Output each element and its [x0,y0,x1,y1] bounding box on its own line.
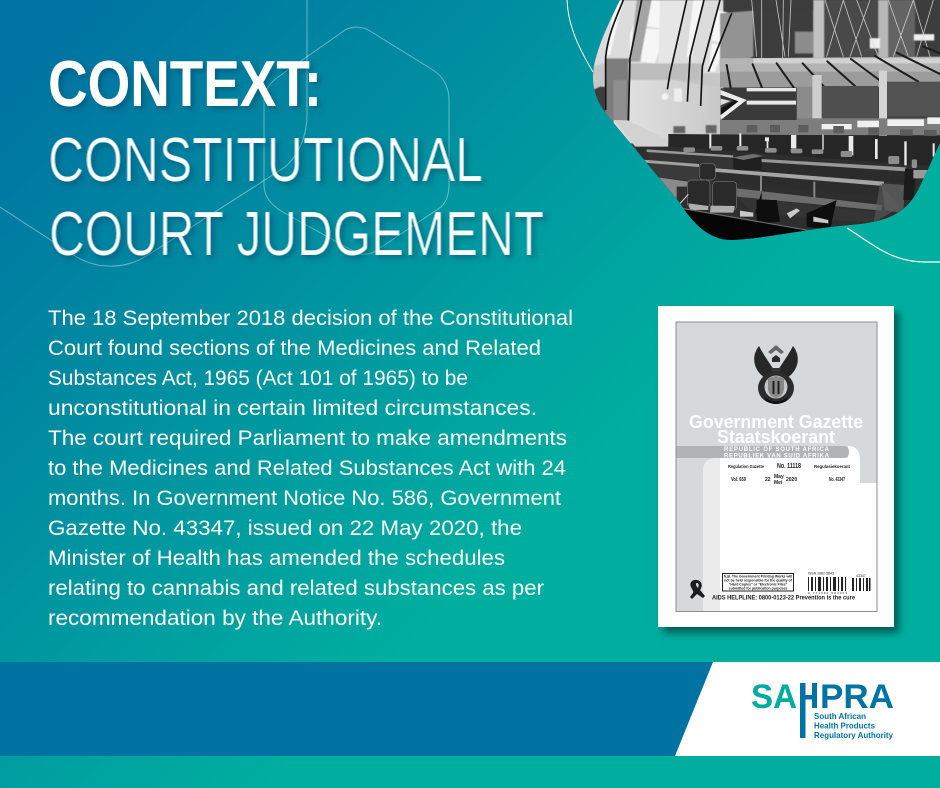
gazette issue details: Regulation Gazette [728,464,764,469]
body text: Court found sections of the Medicines and Related [48,336,541,360]
photo: courtroom interior [580,0,940,243]
body text: Substances Act, 1965 (Act 101 of 1965) to be [48,366,468,390]
gazette document card: not be held responsible for the quality of [724,578,793,582]
title [48,47,544,269]
gazette issue details: 2020 [786,477,797,483]
SAHPRA full name: Regulatory Authority [814,730,893,740]
gazette issue details: 22 [765,477,771,483]
gazette issue details [728,463,850,486]
gazette issue details: No. 11118 [777,463,801,470]
gazette issue details: Regulasiekoerant [814,464,850,469]
title: CONSTITUTIONAL [48,126,483,195]
footer band [0,662,940,756]
title: CONTEXT: [48,47,322,120]
body text: months. In Government Notice No. 586, Government [48,486,561,510]
gazette issue details: No. 43347 [829,477,845,483]
SAHPRA wordmark [751,678,894,738]
logo panel [675,662,940,756]
gazette document card: Staatskoerant [717,426,835,447]
gazette document card: submitted for publication purposes [729,586,787,590]
notice box [722,574,794,591]
gazette issue details: Vol. 659 [731,477,746,483]
chairs [687,163,737,210]
brick walls and pillars [796,86,812,118]
suspended wires [752,0,933,58]
brick wall and upper gallery [720,11,753,72]
gazette document card: REPUBLIC OF SOUTH AFRICA [724,447,830,453]
gazette heading: Government Gazette [689,411,863,432]
slanted mullions [606,0,732,121]
SAHPRA full name [814,711,893,740]
title: COURT JUDGEMENT [49,200,544,269]
flag [721,88,797,120]
ribbon icon [690,580,705,599]
foreground desk edge [684,210,806,240]
body text: recommendation by the Authority. [48,606,382,630]
gazette cover [676,322,877,612]
barcode: 43347 [856,574,866,578]
body text: relating to cannabis and related substances as per [48,576,544,600]
decorative outlines [0,0,940,266]
gazette issue details: Mei [774,480,783,486]
body text: unconstitutional in certain limited circumstances. [48,396,537,420]
SAHPRA wordmark: PRA [820,678,894,716]
body text: Minister of Health has amended the schedules [48,546,505,570]
barcode [808,572,870,595]
barcode: ISSN 1682-5843 [808,572,834,576]
gazette document card: "Hard Copies" or "Electronic Files" [729,582,788,586]
body text: The 18 September 2018 decision of the Constitutional [48,306,573,330]
windows and murals [590,0,940,143]
gazette document card: REPUBLIEK VAN SUID AFRIKA [724,454,830,460]
coat of arms [754,345,798,404]
SAHPRA wordmark: SA [751,678,797,716]
gazette document card [658,306,894,627]
body text: Gazette No. 43347, issued on 22 May 2020, the [48,516,522,540]
bench tiers [648,151,733,169]
body text: The court required Parliament to make amendments [48,426,567,450]
gazette issue details: May [774,474,784,480]
wall below windows [613,120,668,148]
helpline: AIDS HELPLINE: 0800-0123-22 Prevention is the cure [712,596,856,602]
body text: to the Medicines and Related Substances Act with 24 [48,456,566,480]
SAHPRA full name: South African [814,711,866,721]
barcode: 9 771682 584003 [808,591,847,595]
back bench row [668,134,940,170]
body text [48,306,573,630]
gazette document card: N.B. The Government Printing Works will [724,574,792,578]
SAHPRA full name: Health Products [814,720,875,730]
glass canopy [720,57,940,87]
